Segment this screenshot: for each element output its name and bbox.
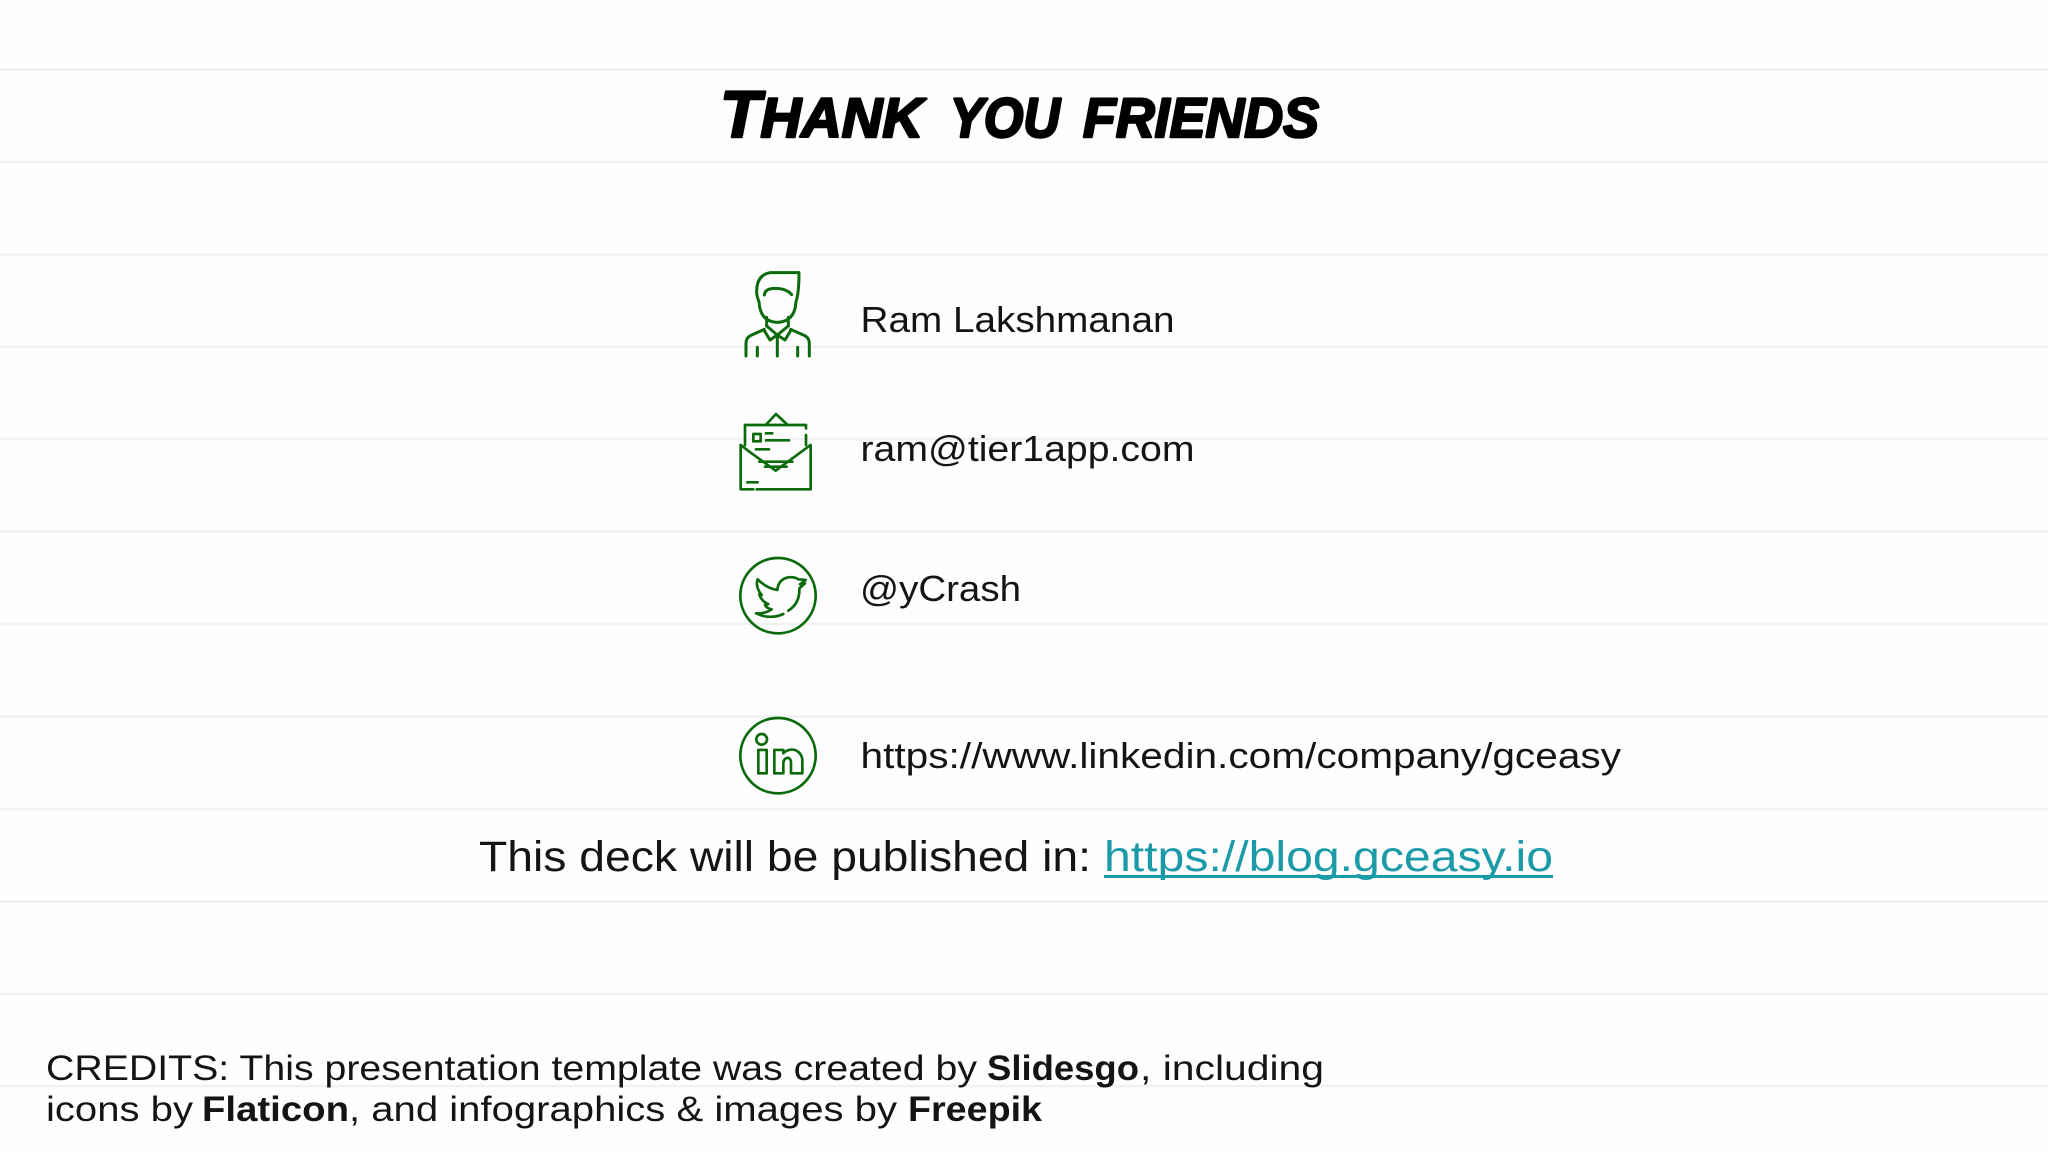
name text: Ram Lakshmanan — [860, 299, 1174, 340]
icon: linkedin in circle — [740, 718, 816, 793]
title: YOU — [950, 86, 1061, 149]
icon: open envelope — [741, 414, 811, 489]
icon: person — [746, 273, 809, 356]
icon: twitter bird in circle — [740, 558, 816, 633]
twitter handle text: @yCrash — [860, 568, 1021, 609]
title: FRIENDS — [1083, 86, 1319, 149]
publication note with blog link — [479, 833, 1553, 881]
credits: CREDITS: This presentation template was created by — [46, 1049, 978, 1088]
credits — [46, 1049, 1324, 1129]
credits: Slidesgo — [987, 1049, 1139, 1088]
credits: Flaticon — [202, 1090, 349, 1129]
publication note with blog link: This deck will be published in: — [479, 833, 1091, 881]
title — [720, 77, 1319, 151]
contact row: twitter — [740, 558, 1021, 633]
credits: , including — [1140, 1049, 1324, 1088]
contact row: name — [746, 273, 1174, 356]
publication note with blog link: https://blog.gceasy.io — [1104, 833, 1553, 881]
credits: Freepik — [908, 1090, 1043, 1129]
contact row: linkedin — [740, 718, 1621, 793]
title: THANK — [720, 77, 927, 151]
linkedin url text: https://www.linkedin.com/company/gceasy — [860, 735, 1621, 776]
credits: , and infographics & images by — [349, 1090, 898, 1129]
contact row: email — [741, 414, 1194, 489]
credits: icons by — [46, 1090, 194, 1129]
email text: ram@tier1app.com — [860, 428, 1194, 469]
